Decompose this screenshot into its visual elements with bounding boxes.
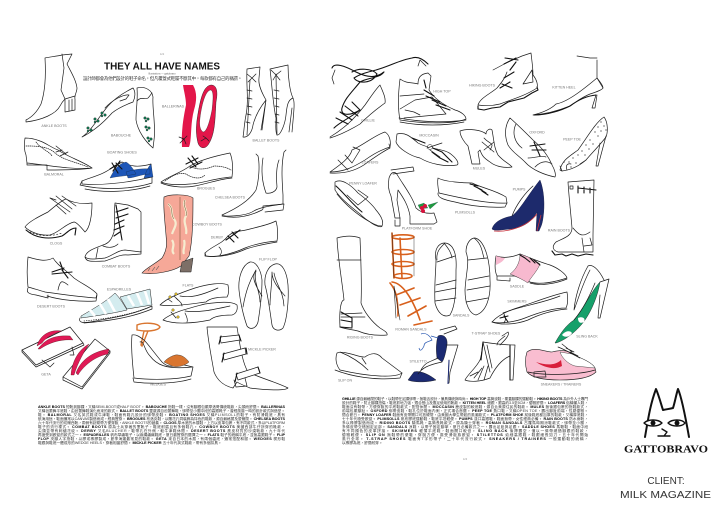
text block: right glossary: 七十年代極受歡迎。 PLIMSOLLS 帆布膠底運動鞋，鞋底平坦輕便。 PUMPS 淺口高跟鞋，鞋面無帶，女性經典必備。 RAIN BOOTS 防水雨靴， bbox=[342, 416, 588, 421]
shoe: clogs: CLOGS bbox=[50, 242, 63, 246]
shoe: roman sandals bbox=[390, 233, 432, 332]
shoe: clogs bbox=[25, 196, 92, 246]
shoe: ankle boots bbox=[26, 54, 77, 128]
title: 設計師都會為他們設計的鞋子命名，但凡覆蓋式鞋履不斷其中，每款都有自己的稱謂。 bbox=[83, 75, 242, 82]
shoe: slip on: SLIP ON bbox=[338, 378, 352, 382]
shoe: mules bbox=[460, 129, 512, 170]
text block: left glossary: FLOP 夾腳人字拖鞋，以膠或橡膠製成，夏季海灘最常見的鞋款。 GETA 來自日本的木屐，有兩個齒底，通常搭配和服。 WEDGES 楔形鞋 bbox=[38, 436, 285, 441]
shoe: kitten heel bbox=[533, 56, 603, 115]
shoe: t-strap shoes: T-STRAP SHOES bbox=[472, 332, 501, 336]
shoe: ballet boots bbox=[243, 65, 294, 142]
text block: right glossary: 鞋面沒有鞋帶，方便穿脫的平底鞋款式，配搭休閒。 MOCCASIN 鹿皮製的軟底鞋，源自北美原住民的鞋款。 MULES 無後跟包裹的拖鞋款式， bbox=[342, 404, 588, 409]
shoe: mickle picker: MICKLE PICKER bbox=[248, 348, 276, 352]
text block: right glossary: 風行全球。 T-STRAP SHOES 鞋面有T字形帶子，二十年代流行款式。 SNEAKERS / TRAINERS 一般運動鞋的統稱， bbox=[342, 436, 588, 441]
shoe: geta: GETA bbox=[41, 372, 51, 376]
text block: left glossary: 航海用途，鞋面通常以CANVAS製造而成，經典實穿。 BROGUES 布洛克鞋，以雕花孔洞裝飾為特色的鞋款，源自蘇格蘭及愛爾蘭。 CHELSEA BOOTS bbox=[38, 416, 286, 421]
shoe: stiletto bbox=[408, 326, 458, 384]
text block: left glossary: ANKLE BOOTS 短靴到腳踝，又稱SEMI-BOOT或HALF BOOT。 BABOUCHE 拖鞋一樣，沒有腳跟包覆摩洛哥傳統鞋款，尖頭而舒適。 BALLERINAS bbox=[38, 404, 286, 409]
shoe: rain boots bbox=[548, 180, 596, 256]
text block: right glossary: 有不同顏色的皮革拼接。 SKIMMERS 輕薄平底鞋，鞋面開口較低。 SLING BACK 後踭露空，僅以一條帶繞過腳跟的鞋款， bbox=[342, 428, 588, 433]
title: 122 bbox=[160, 52, 165, 56]
shoe: loafers bbox=[330, 132, 390, 173]
shoe: peep toe bbox=[560, 117, 607, 171]
shoe: pumps bbox=[492, 180, 544, 231]
title: THEY ALL HAVE NAMES bbox=[104, 62, 220, 72]
shoe: plimsolls bbox=[438, 178, 507, 214]
shoe: babouche: BABOUCHE bbox=[111, 134, 132, 138]
shoe: flip flop bbox=[239, 258, 288, 330]
text block: right glossary: 多條皮帶交錯固定足部。 SANDALS 涼鞋，以帶子固定腳掌，夏日必備款式之一，露出足趾與足跟。 SADDLE SHOES 馬鞍鞋，鞋面中段 bbox=[342, 424, 588, 429]
shoe: ballerinas bbox=[162, 85, 217, 148]
shoe: oxford: OXFORD bbox=[529, 130, 545, 134]
text block: right glossary: GHILLIE 源自蘇格蘭的鞋子，以鞋帶在足踝綁帶，無鞋舌設計，兼具傳統與時尚。 HIGH TOP 高筒波鞋，覆蓋腳踝的運動鞋。 HIKING BOOTS 為戶外人士專門 bbox=[342, 396, 588, 401]
shoe: hiking boots: HIKING BOOTS bbox=[469, 84, 496, 88]
text block: left glossary: 又稱芭蕾舞平底鞋，由芭蕾舞鞋演化而來的款式。 BALLET BOOTS 靈感源自芭蕾舞鞋，綁帶至小腿中段的高跟靴子，曾經風靡一時的設計款式與造型。 bbox=[38, 408, 285, 413]
text block: left glossary: 再度受到歡迎的款式之一。 ESPADRILLES 帆布草編鞋子，以麻繩編織鞋底，夏日最實穿的選擇之一。 FLATS 鞋子的統稱平底，並無高跟鞋子。 FLIP bbox=[38, 432, 286, 437]
shoe: combat boots bbox=[85, 203, 141, 268]
shoe: high top bbox=[398, 73, 466, 125]
shoe: sneakers / trainers: SNEAKERS / TRAINERS bbox=[541, 382, 582, 386]
shoe: loafers: LOAFERS bbox=[362, 160, 379, 164]
text block: left glossary bbox=[38, 404, 286, 445]
text block: right glossary: 以橡膠為底，舒適耐穿。 bbox=[342, 440, 383, 445]
shoe: balmoral: BALMORAL bbox=[44, 172, 64, 176]
shoe: penny loafer: PENNY LOAFER bbox=[349, 182, 377, 186]
title bbox=[83, 52, 242, 82]
shoe: brogues: BROGUES bbox=[197, 186, 216, 190]
shoe: ghillie: GHILLIE bbox=[361, 118, 375, 122]
shoe: oxford bbox=[506, 118, 555, 177]
shoe: balmoral bbox=[24, 138, 92, 176]
shoe: riding boots: RIDING BOOTS bbox=[347, 336, 374, 340]
shoe: moccasin: MOCCASIN bbox=[419, 134, 439, 138]
text block: left glossary: 鞋跟與鞋底一體成形的WEDGE HEELS，穿著相當舒適。 MICKLE PICKER 五十年代英式鞋款，帶有多個扣具。 bbox=[38, 440, 222, 445]
shoe: wedges: WEDGES bbox=[150, 382, 167, 386]
text block: right glossary: 前端包覆腳趾。 OXFORD 綁帶皮鞋，鞋孔位於鞋面內側，正式場合首選。 PEEP TOE 魚口鞋，又稱OPEN TOE，露出腳趾前端，性感優雅。 bbox=[342, 408, 588, 413]
shoe: flats bbox=[160, 284, 237, 323]
text block: right glossary: 優雅輕便。 SLIP ON 無鞋帶的便鞋，穿脫方便，廣受滑板族歡迎。 STILETTOS 幼細高跟鞋，鞋跟細長如刀，五十年代開始 bbox=[342, 432, 588, 437]
shoe: peep toe: PEEP TOE bbox=[563, 138, 581, 142]
shoe: derby: DERBY bbox=[211, 236, 224, 240]
shoe: cowboy boots: COWBOY BOOTS bbox=[192, 222, 223, 226]
shoe: saddle: SADDLE bbox=[510, 284, 525, 288]
shoe: derby bbox=[205, 221, 278, 257]
shoe: skimmers: SKIMMERS bbox=[507, 300, 527, 304]
text block: right glossary: 多以橡膠製造而成。 RIDING BOOTS 騎馬靴，高筒長靴款式，原為騎士穿著。 ROMAN SANDALS 古羅馬時期涼鞋款式，綁帶至小腿， bbox=[342, 420, 588, 425]
shoe: geta bbox=[22, 327, 110, 389]
text block: left glossary: 六十年代流行的切爾西靴，兩側有鬆緊帶方便穿脫，ANKLE BOOTS的變奏。 CLOGS 厚木底的木屐鞋，上方以皮革包裹，有不同款式，多以PLATFORM bbox=[38, 420, 285, 425]
logo wordmark: GATTOBRAVO bbox=[624, 444, 708, 456]
shoe: skimmers bbox=[492, 292, 568, 324]
shoe: riding boots bbox=[337, 236, 387, 340]
shoe: babouche bbox=[82, 87, 155, 148]
shoe: espadrilles: ESPADRILLES bbox=[107, 288, 132, 292]
shoe: flats: FLATS bbox=[183, 284, 194, 288]
text block: right glossary bbox=[342, 396, 588, 445]
title: Illustrations — gattobravo bbox=[148, 72, 176, 76]
text block: left glossary: 尖頭並帶有刺繡花紋。 DERBY 又名BLUCHER，鞋帶孔在外側，較牛津鞋休閒。 DESERT BOOTS 麂皮材質的沙漠靴款，九十年代 bbox=[38, 428, 285, 433]
shoe: boating shoes: BOATING SHOES bbox=[107, 150, 137, 154]
shoe: slip on bbox=[335, 352, 402, 382]
shoe: saddle bbox=[495, 254, 567, 288]
text block: right glossary: 適合夏日。 PENNY LOAFER 鞋面有皮帶開口可放硬幣，由美國大學生帶起的風潮款式。 PLATFORM SHOE 前後鞋底都加厚的鞋款，又稱厚底鞋， bbox=[342, 412, 588, 417]
shoe: chelsea boots: CHELSEA BOOTS bbox=[215, 196, 246, 200]
shoe: wedges bbox=[132, 323, 193, 386]
shoe: ankle boots: ANKLE BOOTS bbox=[41, 124, 67, 128]
shoe: plimsolls: PLIMSOLLS bbox=[455, 210, 476, 214]
shoe: stiletto: STILETTO bbox=[409, 360, 427, 364]
client label: CLIENT: bbox=[647, 476, 685, 487]
shoe: ghillie bbox=[330, 57, 428, 138]
shoe: sandals bbox=[435, 238, 490, 318]
shoe: moccasin bbox=[396, 133, 458, 166]
shoe: sneakers / trainers bbox=[526, 344, 596, 386]
shoe: kitten heel: KITTEN HEEL bbox=[552, 86, 576, 90]
shoe: chelsea boots bbox=[215, 150, 286, 217]
logo: gattobravo cat bbox=[644, 389, 689, 437]
shoe: brogues bbox=[161, 153, 233, 190]
shoe: espadrilles bbox=[80, 288, 152, 323]
shoe: sling back: SLING BACK bbox=[576, 334, 598, 338]
shoe: roman sandals: ROMAN SANDALS bbox=[395, 328, 427, 332]
shoe: cowboy boots bbox=[142, 195, 223, 274]
shoe: ballerinas: BALLERINAS bbox=[162, 104, 185, 108]
shoe: high top: HIGH TOP bbox=[433, 90, 451, 94]
shoe: desert boots bbox=[27, 257, 97, 308]
shoe: flip flop: FLIP FLOP bbox=[259, 258, 278, 262]
shoe: ballet boots: BALLET BOOTS bbox=[253, 138, 280, 142]
shoe: rain boots: RAIN BOOTS bbox=[548, 228, 571, 232]
shoe: sling back bbox=[555, 266, 609, 343]
shoe: desert boots: DESERT BOOTS bbox=[37, 304, 66, 308]
client name: MILK MAGAZINE bbox=[620, 490, 711, 501]
page number: 123 bbox=[463, 457, 468, 461]
shoe: penny loafer bbox=[335, 181, 383, 227]
shoe: boating shoes bbox=[80, 150, 153, 191]
text block: right glossary: 設計的鞋子，防止腳踝扭傷，鞋底抓地力強，適合登山及遠足使用的靴款。 KITTEN HEEL 細跟，跟高約3.5至5CM，優雅舒適。 LOAFERS 俗稱懶人鞋， bbox=[342, 400, 588, 405]
text block: left glossary: 鞋子的流行樣式。 COMBAT BOOTS 原為士兵穿著的軍靴子，鞋底耐磨且有多個鞋孔。 COWBOY BOOTS 美國西部牛仔所穿的靴款， bbox=[38, 424, 285, 429]
shoe: t-strap shoes bbox=[465, 332, 515, 381]
shoe: pumps: PUMPS bbox=[513, 188, 526, 192]
shoe: hiking boots bbox=[469, 53, 538, 110]
shoe: combat boots: COMBAT BOOTS bbox=[102, 264, 131, 268]
shoe: platform shoe: PLATFORM SHOE bbox=[402, 226, 433, 230]
shoe: sandals: SANDALS bbox=[453, 314, 470, 318]
shoe: mickle picker bbox=[207, 327, 288, 390]
shoe: mules: MULES bbox=[473, 166, 486, 170]
shoe: platform shoe bbox=[388, 167, 438, 230]
text block: left glossary: 鞋。 BALMORAL 又名英式鞋或牛津鞋，鞋面有鞋孔設計的綁帶皮鞋。 BOATING SHOES 又稱PLIMSOLL的鞋子，有防滑鞋底，具有 bbox=[38, 412, 285, 417]
